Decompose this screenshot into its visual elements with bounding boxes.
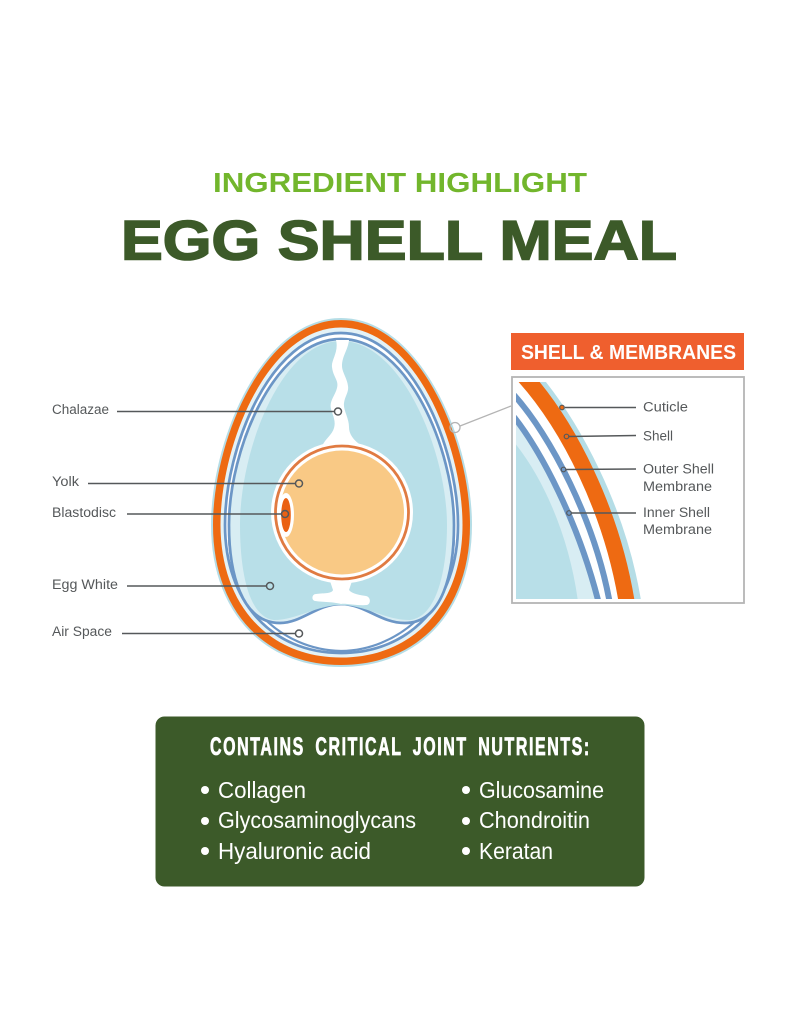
- inset cuticle: [530, 376, 633, 604]
- yolk halo: [271, 442, 413, 584]
- inset label: outer shell membrane: [561, 462, 714, 494]
- inner shell membrane lower arc: [229, 540, 454, 651]
- outer shell membrane: [225, 333, 458, 653]
- vitelline ring: [276, 446, 408, 579]
- panel heading: CONTAINS CRITICAL JOINT NUTRIENTS:: [210, 734, 591, 761]
- inset label: inner shell membrane: Inner Shell: [643, 505, 710, 520]
- nutrient list left: [201, 777, 416, 864]
- blastodisc halo: [278, 493, 294, 537]
- inner shell membrane and air space curve: [229, 339, 454, 623]
- inset label: inner shell membrane: [567, 505, 712, 537]
- label: chalazae: Chalazae: [52, 402, 109, 417]
- inset header: [511, 333, 744, 370]
- label: yolk: Yolk: [52, 474, 79, 489]
- label: chalazae: [52, 402, 342, 417]
- panel background: [156, 716, 644, 886]
- shell gap: [220, 328, 462, 658]
- nutrient list right: [462, 777, 604, 864]
- nutrient list left: Glycosaminoglycans: [218, 807, 416, 833]
- inset panel: shell and membranes: [512, 376, 744, 604]
- inset egg white: [514, 442, 578, 602]
- egg cuticle: [211, 318, 472, 667]
- inset label: inner shell membrane: Membrane: [643, 522, 712, 537]
- blastodisc: [281, 498, 291, 532]
- nutrient list right: Chondroitin: [479, 807, 590, 833]
- egg shell: [213, 320, 470, 665]
- label: blastodisc: [52, 505, 288, 520]
- inset header: SHELL & MEMBRANES: [521, 342, 736, 364]
- chalazae top: [322, 340, 362, 446]
- egg diagram: [211, 318, 472, 667]
- label: blastodisc: Blastodisc: [52, 505, 116, 520]
- inset frame: [512, 377, 744, 603]
- inset label: shell: [564, 428, 673, 444]
- nutrients panel: [156, 716, 644, 886]
- inset layers: [514, 376, 633, 604]
- inset pale layer: [516, 424, 594, 599]
- nutrient list right: Keratan: [479, 838, 553, 864]
- inset label: shell: Shell: [643, 428, 673, 444]
- label: air space: [52, 624, 302, 639]
- label: egg white: Egg White: [52, 577, 118, 592]
- inset inner membrane: [514, 417, 599, 604]
- yolk body: [280, 450, 404, 574]
- title: ingredient highlight: INGREDIENT HIGHLIGHT: [213, 167, 587, 198]
- label: egg white: [52, 577, 274, 592]
- nutrient list left: Collagen: [218, 777, 306, 803]
- yolk: [271, 442, 413, 584]
- infographic: [52, 172, 745, 886]
- inset outer membrane: [514, 395, 610, 604]
- inset label: outer shell membrane: Membrane: [643, 479, 712, 494]
- title: egg shell meal: EGG SHELL MEAL: [121, 208, 677, 272]
- nutrient list left: Hyaluronic acid: [218, 838, 371, 864]
- inset shell: [524, 376, 627, 604]
- inset label: cuticle: Cuticle: [643, 400, 688, 414]
- egg white: [240, 341, 447, 620]
- label: yolk: [52, 474, 302, 489]
- inset label: outer shell membrane: Outer Shell: [643, 462, 714, 476]
- nutrient list right: Glucosamine: [479, 777, 604, 803]
- label: air space: Air Space: [52, 624, 112, 639]
- inset label: cuticle: [560, 400, 688, 414]
- inset connector: [450, 406, 511, 432]
- chalazae bottom: [312, 578, 370, 605]
